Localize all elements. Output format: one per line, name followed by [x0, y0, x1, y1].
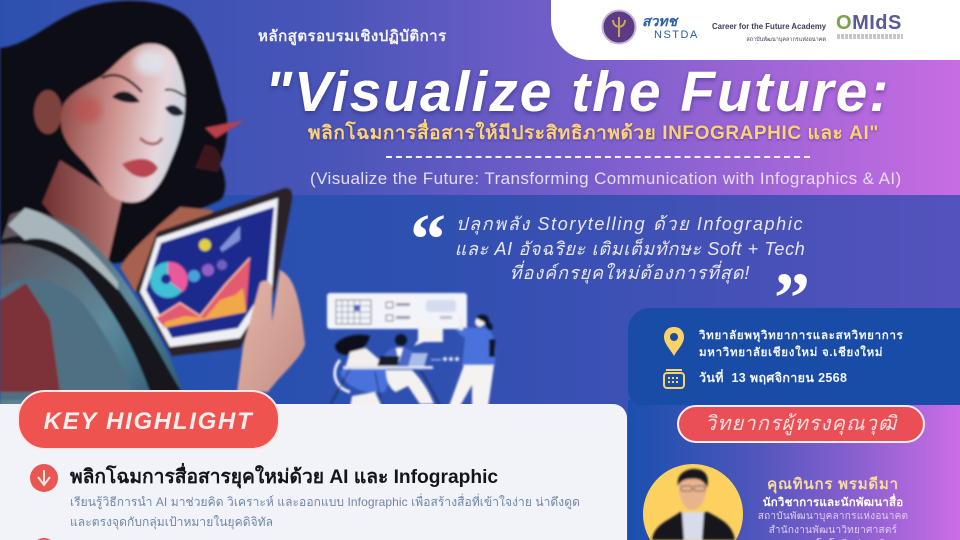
standing woman — [456, 327, 496, 366]
info panel: venue and date — [628, 308, 960, 405]
tablet chart — [150, 262, 186, 298]
badge: key highlight — [17, 390, 280, 450]
hair — [0, 1, 227, 270]
speaker photo — [643, 464, 743, 540]
hand — [237, 270, 305, 392]
speaker organization: สถาบันพัฒนาบุคลากรแห่งอนาคต — [758, 511, 908, 522]
speaker panel background — [628, 400, 960, 540]
logo: academy — [712, 22, 826, 43]
laptops — [377, 356, 400, 367]
logo: NSTDA wordmark: สวทช — [642, 13, 677, 29]
icon: highlight bullet — [30, 464, 58, 492]
logo: NSTDA wordmark — [642, 13, 699, 41]
icon: calendar — [663, 369, 685, 389]
speaker name: คุณทินกร พรมดีมา — [767, 476, 899, 493]
speaker details — [758, 476, 908, 540]
ear — [34, 90, 62, 134]
logo: NSTDA wordmark: NSTDA — [654, 29, 699, 41]
tablet — [136, 188, 292, 356]
lips — [122, 159, 158, 177]
logo: OMIdS: OMIdS — [836, 12, 902, 34]
title: "Visualize the Future: — [265, 60, 890, 124]
illustration: woman holding tablet — [0, 0, 306, 404]
seated woman — [335, 335, 370, 355]
logo: academy: Career for the Future Academy — [712, 22, 826, 31]
jacket — [0, 211, 185, 425]
english subtitle: (Visualize the Future: Transforming Communication with Infographics & AI) — [310, 169, 902, 188]
item description: และตรงจุดกับกลุ่มเป้าหมายในยุคดิจิทัล — [70, 515, 273, 529]
dots — [443, 357, 447, 361]
venue text: วิทยาลัยพหุวิทยาการและสหวิทยาการ — [699, 330, 904, 342]
speaker role: นักวิชาการและนักพัฒนาสื่อ — [763, 497, 903, 509]
logo: NSTDA seal — [602, 10, 636, 44]
speaker organization — [758, 511, 908, 540]
highlight item 1 — [30, 463, 580, 530]
item description — [70, 494, 580, 530]
table — [343, 366, 433, 369]
neck — [42, 160, 122, 290]
speech bubble — [414, 327, 443, 346]
quote text: ที่องค์กรยุคใหม่ต้องการที่สุด! — [510, 263, 750, 283]
quote text — [455, 214, 805, 284]
seated man — [395, 334, 407, 346]
date text: วันที่ 13 พฤศจิกายน 2568 — [699, 371, 847, 385]
icon: location pin — [664, 327, 684, 356]
quote block — [410, 199, 810, 338]
subtitle: พลิกโฉมการสื่อสารให้มีประสิทธิภาพด้วย INFOGRAPHIC และ AI" — [308, 123, 879, 144]
icon: opening quote: “ — [410, 199, 446, 279]
course type label: หลักสูตรอบรมเชิงปฏิบัติการ — [258, 28, 447, 45]
illustration: team at whiteboard — [325, 291, 497, 404]
badge: expert speakers — [677, 405, 925, 443]
logo: academy: สถาบันพัฒนาบุคลากรแห่งอนาคต — [746, 37, 826, 43]
quote text: ปลุกพลัง Storytelling ด้วย Infographic — [456, 214, 804, 234]
item heading: พลิกโฉมการสื่อสารยุคใหม่ด้วย AI และ Infographic — [70, 467, 498, 488]
speaker organization: สำนักงานพัฒนาวิทยาศาสตร์ — [769, 525, 897, 536]
quote text: และ AI อัจฉริยะ เติมเต็มทักษะ Soft + Tech — [455, 238, 805, 258]
badge: key highlight: KEY HIGHLIGHT — [44, 408, 253, 435]
panel: key highlight — [0, 404, 627, 540]
logo: OMIdS tagline — [837, 34, 903, 39]
next item bullet — [32, 538, 56, 540]
venue text — [698, 330, 904, 359]
whiteboard — [327, 293, 467, 329]
icon: closing quote: ” — [774, 258, 810, 338]
badge: expert speakers: วิทยากรผู้ทรงคุณวุฒิ — [705, 413, 897, 435]
eyes — [112, 91, 140, 103]
header gradient band — [0, 0, 960, 195]
logo panel — [551, 0, 960, 60]
item description: เรียนรู้วิธีการนำ AI มาช่วยคิด วิเคราะห์ และออกแบบ Infographic เพื่อสร้างสื่อที่เข้าใจง่าย น่าดึงดูด — [70, 495, 580, 509]
arm behind tablet — [120, 207, 213, 292]
dashed divider — [386, 156, 810, 158]
venue text: มหาวิทยาลัยเชียงใหม่ จ.เชียงใหม่ — [699, 347, 883, 359]
face — [61, 44, 185, 202]
